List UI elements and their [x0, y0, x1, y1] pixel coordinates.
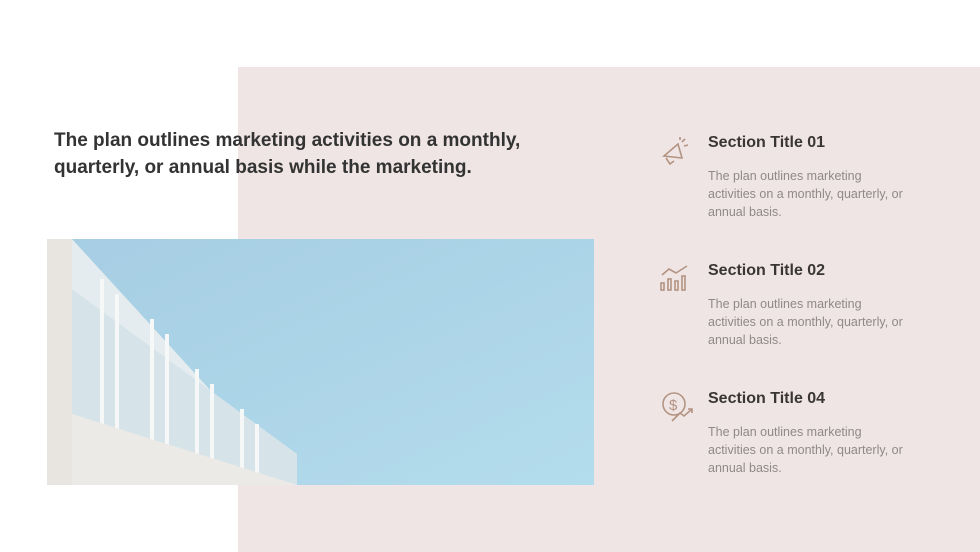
icon: chart — [660, 266, 688, 291]
background panel — [238, 67, 980, 552]
section 02 — [660, 262, 903, 347]
icon: dollar growth: $ — [669, 397, 678, 414]
text 02: The plan outlines marketing activities on a monthly, quarterly, or annual basis. — [708, 297, 903, 347]
photo: building against sky — [47, 239, 594, 485]
title 04: Section Title 04 — [708, 390, 825, 407]
text 04: The plan outlines marketing activities on a monthly, quarterly, or annual basis. — [708, 425, 903, 475]
title 02: Section Title 02 — [708, 262, 825, 279]
section 04 — [662, 390, 903, 475]
icon: dollar growth — [662, 392, 693, 422]
section 01 — [662, 134, 903, 219]
title 01: Section Title 01 — [708, 134, 825, 151]
text 01: The plan outlines marketing activities on a monthly, quarterly, or annual basis. — [708, 169, 903, 219]
headline: The plan outlines marketing activities on a monthly, quarterly, or annual basis while the marketing. — [54, 130, 520, 178]
icon: megaphone — [662, 137, 688, 165]
